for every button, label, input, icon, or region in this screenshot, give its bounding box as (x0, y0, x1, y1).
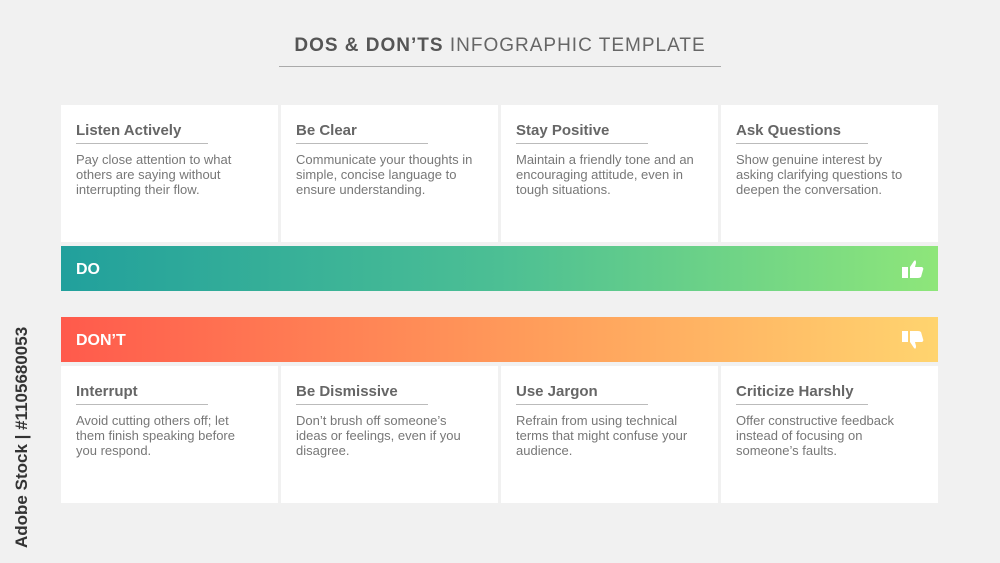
bar: do (61, 246, 938, 291)
card: stay positive (501, 105, 718, 242)
bar: don't (61, 317, 938, 362)
card: interrupt: Avoid cutting others off; let them finish speaking before you respond. (76, 413, 235, 458)
side watermark text: Adobe Stock | #1105680053 (12, 327, 31, 548)
card: be dismissive: Don’t brush off someone’s ideas or feelings, even if you disagree. (296, 413, 461, 458)
card: use jargon: Use Jargon (516, 383, 598, 400)
card: interrupt: Interrupt (76, 383, 138, 400)
card: stay positive: Stay Positive (516, 122, 609, 139)
title: DOS & DON’TS INFOGRAPHIC TEMPLATE (294, 35, 706, 56)
card: be clear (281, 105, 498, 242)
card: be clear: Be Clear (296, 122, 357, 139)
icon: thumbs up (902, 260, 924, 278)
card: be dismissive: Be Dismissive (296, 383, 398, 400)
card: ask questions (721, 105, 938, 242)
card: interrupt (61, 366, 278, 503)
card: use jargon (501, 366, 718, 503)
bar: don't: DON’T (76, 332, 126, 349)
card: criticize harshly: Criticize Harshly (736, 383, 854, 400)
icon: thumbs down (902, 331, 924, 349)
card: listen actively: Pay close attention to what others are saying without interrupting their flow. (76, 152, 231, 197)
card: be clear: Communicate your thoughts in simple, concise language to ensure understanding. (296, 152, 472, 197)
card: ask questions: Ask Questions (736, 122, 841, 139)
card: listen actively (61, 105, 278, 242)
card: use jargon: Refrain from using technical terms that might confuse your audience. (516, 413, 687, 458)
card: stay positive: Maintain a friendly tone and an encouraging attitude, even in tough situations. (516, 152, 694, 197)
card: criticize harshly: Offer constructive feedback instead of focusing on someone’s faults. (736, 413, 894, 458)
bar: do: DO (76, 261, 100, 278)
card: be dismissive (281, 366, 498, 503)
card: ask questions: Show genuine interest by asking clarifying questions to deepen the conversation. (736, 152, 902, 197)
card: listen actively: Listen Actively (76, 122, 181, 139)
card: criticize harshly (721, 366, 938, 503)
